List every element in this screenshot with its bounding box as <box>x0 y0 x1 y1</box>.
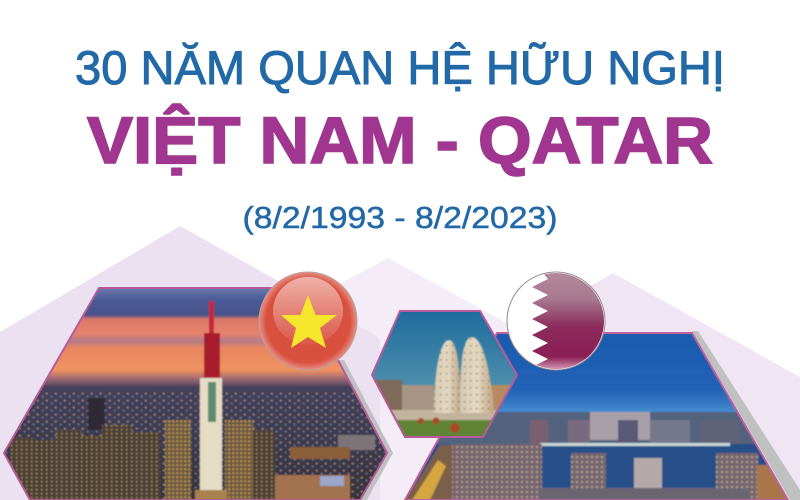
subtitle: country names: VIỆT NAM - QATAR <box>87 103 713 177</box>
icon: Qatar flag <box>507 270 610 372</box>
Landmark 81 tower <box>200 301 222 494</box>
photo: Doha Pearl skyline <box>400 331 800 500</box>
photo: Doha pigeon towers <box>372 311 518 438</box>
icon: Vietnam flag <box>259 272 357 370</box>
background hexagon shapes <box>0 226 800 500</box>
title: 30 NĂM QUAN HỆ HỮU NGHỊ <box>75 41 725 94</box>
date range: (8/2/1993 - 8/2/2023) <box>242 200 558 235</box>
photo: Ho Chi Minh City skyline <box>0 288 400 500</box>
